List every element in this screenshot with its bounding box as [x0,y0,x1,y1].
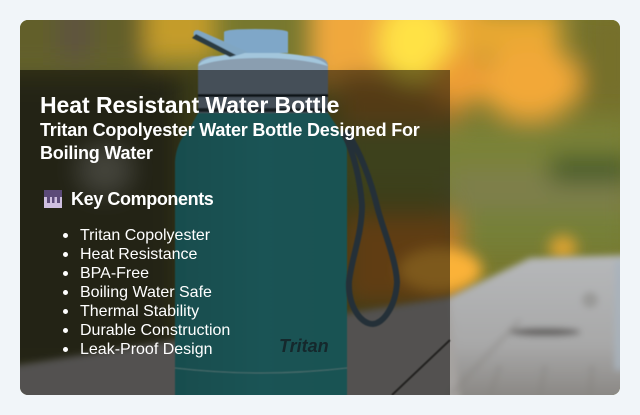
list: key components: Leak-Proof Design [80,341,213,358]
list: key components: Durable Construction [80,322,230,339]
subtitle: Boiling Water [40,143,153,163]
bottle body [175,29,347,405]
list: key components: Tritan Copolyester [80,227,210,244]
title: Heat Resistant Water Bottle [40,92,339,118]
list: key components: BPA-Free [80,265,149,282]
list: key components: Boiling Water Safe [80,284,212,301]
subtitle: Tritan Copolyester Water Bottle Designed For [40,120,420,140]
overlay panel [20,70,450,395]
strap loop [345,132,397,324]
heading: key components: Key Components [71,189,213,209]
wooden table [0,255,630,405]
icon: piano keys [44,190,62,208]
subtitle [40,120,420,163]
list: key components: Thermal Stability [80,303,199,320]
orange highlights [398,235,577,292]
list: key components [63,227,230,358]
tritan logo: Tritan [279,336,329,356]
list: key components: Heat Resistance [80,246,197,263]
